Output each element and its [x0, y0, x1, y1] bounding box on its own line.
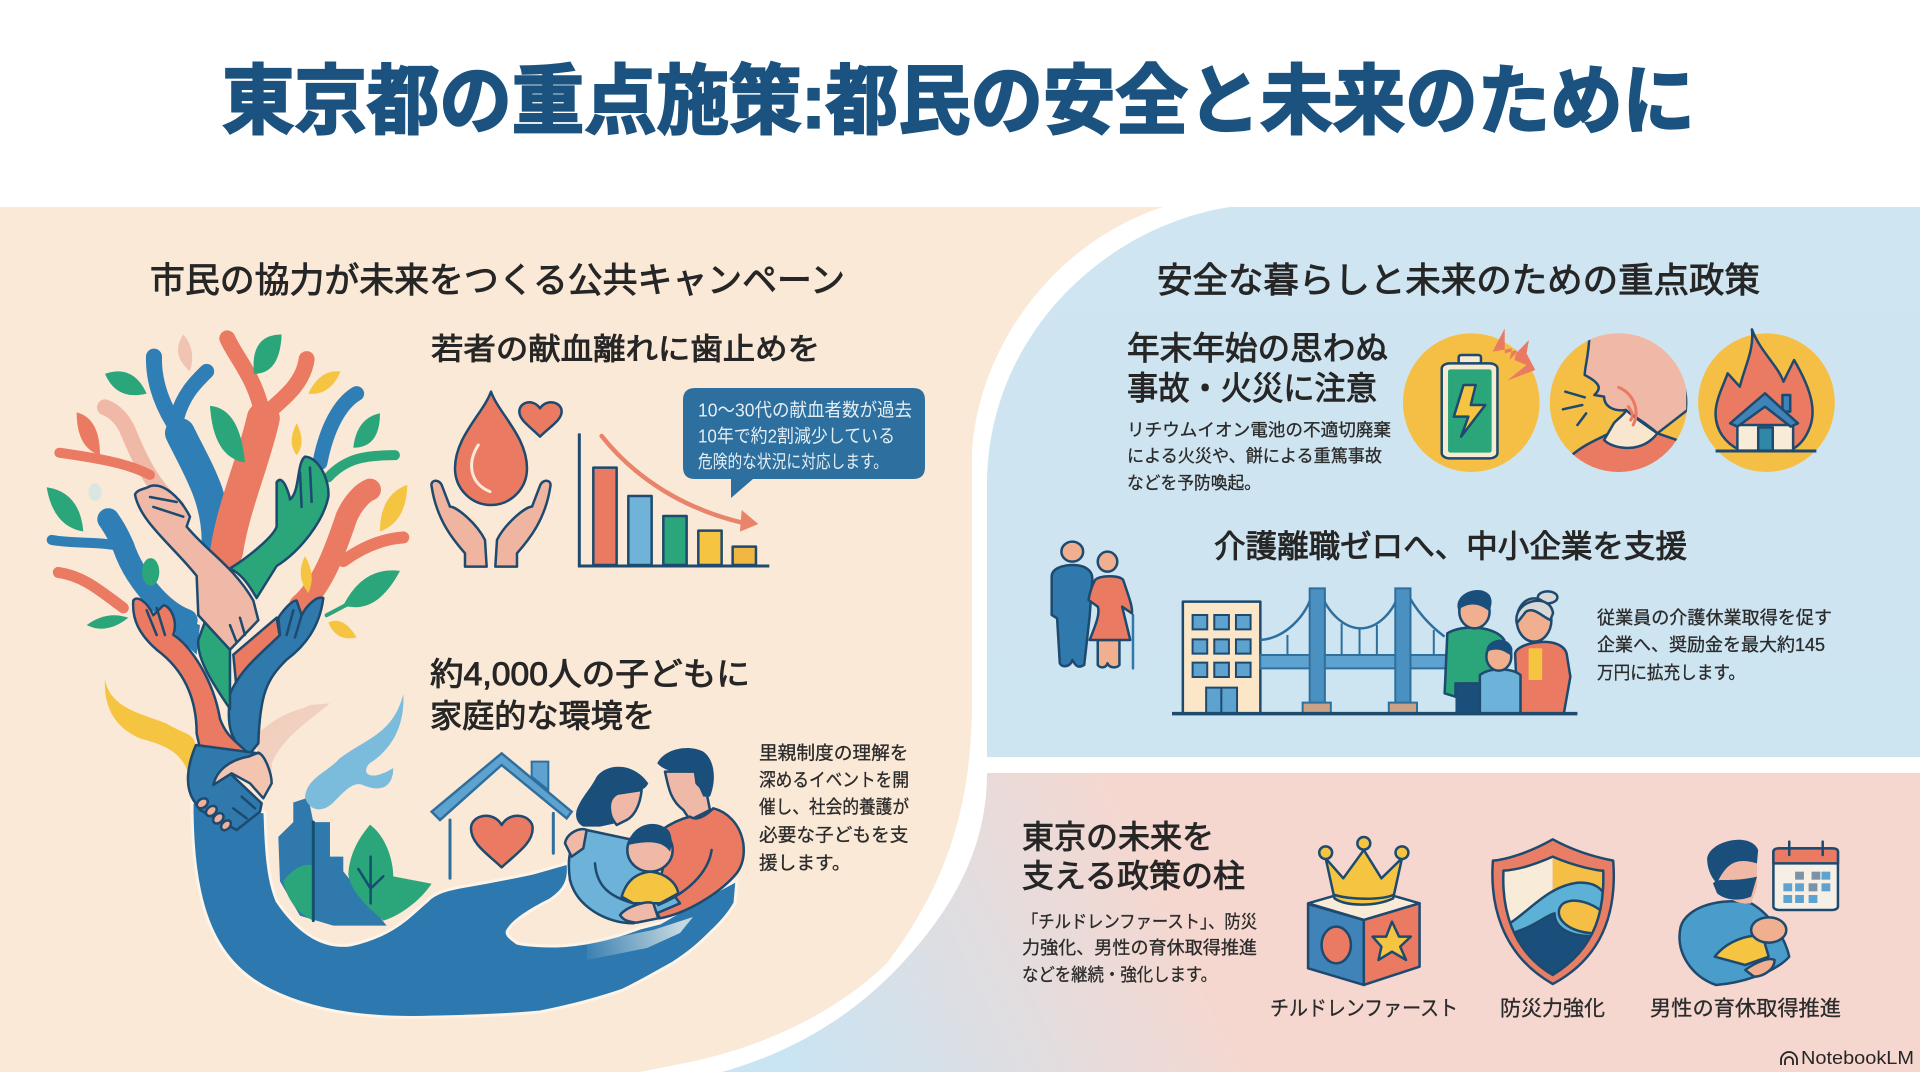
mom body: [569, 830, 680, 923]
illustration: building bridge family: [1172, 588, 1577, 714]
chimney: [312, 822, 315, 921]
child: [1480, 669, 1521, 713]
branches: [52, 338, 403, 620]
heading: pillars: 東京の未来を: [1022, 819, 1214, 855]
icon: choking: [1550, 330, 1687, 477]
panel: pillars: [722, 773, 1920, 1072]
label: children first: チルドレンファースト: [1270, 998, 1458, 1020]
axes: [579, 433, 769, 566]
yellow swoosh: [105, 679, 195, 773]
leaves: [47, 334, 400, 629]
left hand: [431, 481, 487, 567]
text: foster care: 催し、社会的養護が: [759, 796, 909, 818]
heading: pillars: 支える政策の柱: [1022, 858, 1245, 894]
drop: [455, 392, 527, 505]
heading: safety policies: 安全な暮らしと未来のための重点政策: [1157, 262, 1760, 300]
bridge: [1260, 592, 1445, 640]
icon: house with heart: [432, 753, 572, 878]
bars: [593, 468, 756, 565]
text: foster care: 必要な子どもを支: [759, 824, 908, 846]
pink arm: [135, 486, 258, 650]
pale arm: [257, 703, 330, 783]
right hand: [495, 481, 551, 567]
child hair: [628, 824, 672, 852]
heading: foster care: 約4,000人の子どもに: [430, 656, 750, 692]
tree and city: [47, 334, 432, 926]
icon: crown on toy block: [1308, 837, 1420, 985]
text: foster care: 援します。: [759, 852, 851, 874]
knuckle lines: [233, 797, 255, 818]
building: [1183, 602, 1260, 713]
text: accident warning: などを予防喚起。: [1127, 473, 1261, 493]
heading: foster care: [430, 656, 750, 734]
tree: [348, 825, 432, 921]
mom face: [608, 790, 642, 825]
highlight: [472, 445, 490, 492]
dad body: [653, 808, 744, 918]
illustration: family: [565, 748, 744, 923]
text: pillars: 力強化、男性の育休取得推進: [1022, 938, 1257, 958]
title: 東京都の重点施策:都民の安全と未来のために: [222, 60, 1695, 144]
heading: accident warning: 事故・火災に注意: [1127, 370, 1377, 406]
text: care support: 従業員の介護休業取得を促す: [1597, 608, 1832, 628]
text: care support: 万円に拡充します。: [1597, 663, 1745, 683]
text: pillars: [1022, 912, 1257, 985]
fingers: [195, 796, 210, 810]
panel: public campaigns: [0, 207, 1163, 1072]
child head: [627, 828, 673, 872]
trend arrow: [602, 436, 745, 523]
city: [278, 798, 387, 926]
light swoosh: [587, 917, 693, 960]
text: accident warning: による火災や、餅による重篤事故: [1127, 446, 1382, 466]
heading: public campaigns: 市民の協力が未来をつくる公共キャンペーン: [150, 262, 845, 300]
text: accident warning: [1127, 420, 1391, 493]
hill: [283, 865, 313, 921]
text: accident warning: リチウムイオン電池の不適切廃棄: [1127, 420, 1391, 440]
text: care support: [1597, 608, 1832, 683]
callout: donors statistic: 危険的な状況に対応します。: [698, 452, 888, 472]
green center leaf: [198, 613, 230, 709]
bar chart: declining donors: [579, 433, 769, 566]
blue hand: [188, 745, 262, 830]
text: pillars: 「チルドレンファースト」、防災: [1022, 912, 1257, 932]
arm lines and hands: [595, 863, 633, 903]
finger lines: [147, 467, 312, 642]
icon: wave shield: [1492, 839, 1614, 984]
ground: [1172, 712, 1577, 715]
callout: donors statistic: 10年で約2割減少している: [698, 426, 895, 446]
illustration: tree of hands and stream: [47, 334, 737, 1017]
watermark: NotebookLM: NotebookLM: [1801, 1048, 1914, 1068]
green arm: [230, 457, 328, 598]
text: care support: 企業へ、奨励金を最大約145: [1597, 635, 1825, 655]
callout: donors statistic: [683, 388, 925, 498]
icon: house fire: [1698, 329, 1835, 472]
heading: blood donation: 若者の献血離れに歯止めを: [431, 334, 820, 366]
dad face: [665, 772, 710, 820]
center pieces: [175, 615, 200, 655]
handshake: [188, 703, 330, 832]
heading: foster care: 家庭的な環境を: [430, 698, 655, 734]
label: paternity leave: 男性の育休取得推進: [1650, 998, 1841, 1020]
heart: [519, 402, 562, 437]
stream: [192, 802, 737, 1017]
icon: battery: [1403, 328, 1540, 472]
pale swoosh: [257, 706, 313, 768]
text: foster care: 深めるイベントを開: [759, 770, 909, 790]
icon: elderly couple: [1052, 542, 1133, 668]
dad hair: [657, 748, 714, 797]
heading: accident warning: 年末年始の思わぬ: [1127, 330, 1388, 366]
smoke: [305, 694, 403, 809]
grandmother: [1515, 642, 1570, 713]
father: [1455, 683, 1483, 713]
heading: care support: 介護離職ゼロへ、中小企業を支援: [1214, 528, 1687, 564]
text: foster care: 里親制度の理解を: [759, 742, 908, 764]
icon: blood drop and hands: [431, 392, 562, 567]
callout: donors statistic: 10～30代の献血者数が過去: [698, 400, 912, 420]
child shirt: [622, 872, 678, 903]
heading: accident warning: [1127, 330, 1388, 406]
panel: safety policies: [987, 207, 1920, 757]
label: disaster resilience: 防災力強化: [1500, 998, 1605, 1020]
text: pillars: などを継続・強化します。: [1022, 965, 1217, 985]
lower right blue arm: [229, 598, 323, 756]
tree trunk: [358, 857, 383, 903]
pale hand: [213, 753, 272, 798]
mom hair: [576, 767, 648, 827]
lower left red arm: [133, 599, 250, 756]
text: foster care: [759, 742, 909, 874]
heading: pillars: [1022, 819, 1245, 894]
mom hand: [565, 829, 587, 857]
icon: father with baby and calendar: [1680, 840, 1838, 985]
